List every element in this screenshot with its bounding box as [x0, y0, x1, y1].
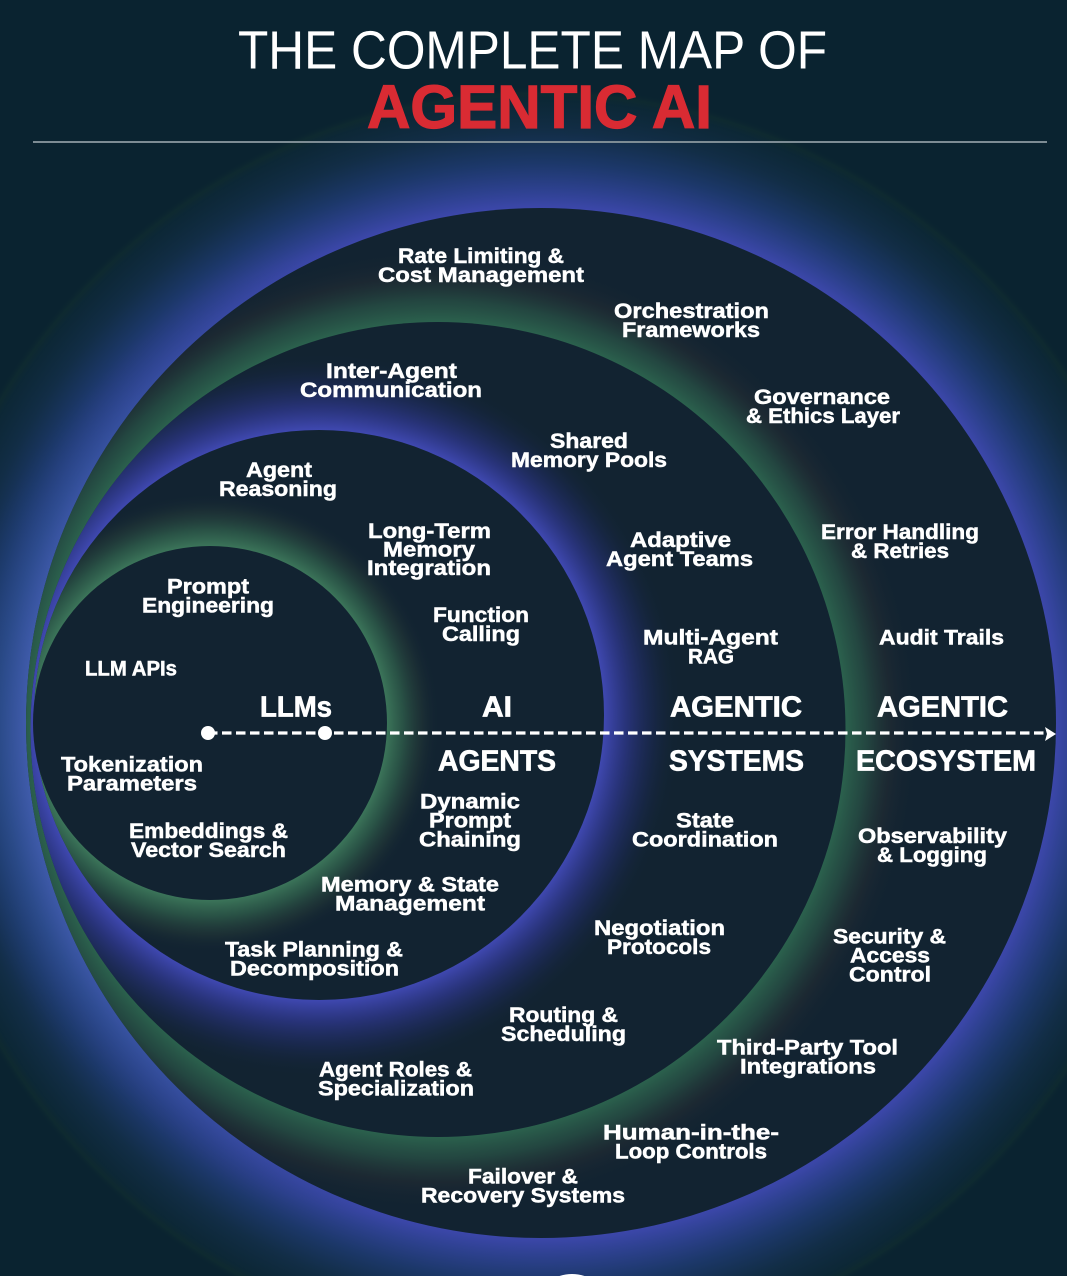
heading: Agentic Systems: SYSTEMS	[669, 746, 804, 778]
label: Rate Limiting & Cost Management: Rate Limiting &	[398, 245, 564, 268]
label: Task Planning & Decomposition: Decomposition	[230, 958, 399, 980]
ring: LLMs	[33, 546, 387, 900]
label: Adaptive Agent Teams: Agent Teams	[606, 548, 753, 571]
label: Tokenization Parameters: Tokenization	[61, 754, 203, 776]
label: Routing & Scheduling	[501, 1004, 626, 1046]
label: LLM APIs: LLM APIs	[85, 658, 177, 680]
label: Third-Party Tool Integrations	[717, 1036, 898, 1078]
label: Task Planning & Decomposition: Task Planning &	[225, 938, 403, 962]
label: Inter-Agent Communication: Inter-Agent	[326, 360, 457, 383]
heading: Agentic Ecosystem: ECOSYSTEM	[856, 746, 1036, 778]
label: Shared Memory Pools: Shared	[550, 430, 628, 453]
label: Failover & Recovery Systems: Failover &	[468, 1166, 578, 1188]
label: Orchestration Frameworks: Orchestration	[614, 300, 769, 323]
label: Error Handling & Retries: & Retries	[851, 540, 949, 563]
cropped white circle at bottom edge	[560, 1274, 584, 1276]
ring: AI agents	[34, 430, 604, 1000]
label: Long-Term Memory Integration: Integration	[367, 557, 491, 580]
label: State Coordination: Coordination	[632, 828, 778, 852]
label: Governance & Ethics Layer	[746, 386, 900, 428]
label: Dynamic Prompt Chaining: Prompt	[429, 810, 511, 832]
label: State Coordination	[632, 810, 778, 852]
label: Security & Access Control: Access	[850, 944, 930, 968]
label: Rate Limiting & Cost Management	[378, 245, 584, 287]
label: Long-Term Memory Integration: Long-Term	[368, 520, 491, 543]
label: Human-in-the-Loop Controls	[603, 1122, 779, 1164]
label: Embeddings & Vector Search	[129, 820, 288, 862]
label: Observability & Logging: Observability	[858, 825, 1007, 848]
label: Multi-Agent RAG	[643, 626, 778, 668]
label: Orchestration Frameworks	[614, 300, 769, 342]
label: Memory & State Management: Management	[335, 892, 485, 916]
label: Negotiation Protocols	[594, 917, 725, 959]
label: Agent Roles & Specialization	[318, 1058, 474, 1100]
label: Memory & State Management: Memory & State	[321, 874, 499, 896]
label: Embeddings & Vector Search: Embeddings &	[129, 820, 288, 843]
heading: Agentic Systems	[669, 692, 804, 778]
label: Dynamic Prompt Chaining: Chaining	[419, 828, 521, 852]
ring: agentic systems	[30, 322, 846, 1137]
heading: Agentic Systems: AGENTIC	[670, 692, 802, 724]
label: Negotiation Protocols: Negotiation	[594, 917, 725, 940]
label: Governance & Ethics Layer: Governance	[754, 386, 890, 409]
heading: Agentic Ecosystem: AGENTIC	[877, 692, 1008, 724]
label: Task Planning & Decomposition	[225, 938, 403, 980]
label: Dynamic Prompt Chaining	[419, 790, 521, 852]
label: Rate Limiting & Cost Management: Cost Management	[378, 264, 584, 287]
heading: AI Agents: AI	[482, 692, 512, 724]
label: Function Calling: Calling	[442, 623, 520, 646]
label: Prompt Engineering: Engineering	[142, 594, 274, 618]
label: Error Handling & Retries	[821, 521, 979, 563]
title	[238, 20, 827, 141]
label: Tokenization Parameters	[61, 754, 203, 796]
label: Long-Term Memory Integration: Memory	[383, 538, 475, 562]
label: Tokenization Parameters: Parameters	[67, 772, 197, 796]
label: Agent Roles & Specialization: Specialization	[318, 1078, 474, 1100]
title divider	[33, 141, 1047, 143]
title: THE COMPLETE MAP OF	[238, 20, 827, 80]
label: State Coordination: State	[676, 810, 734, 832]
heading: AI Agents	[438, 692, 556, 778]
label: Prompt Engineering: Prompt	[167, 576, 249, 598]
label: Multi-Agent RAG: RAG	[688, 646, 734, 668]
label: Dynamic Prompt Chaining: Dynamic	[420, 790, 520, 814]
label: Agent Reasoning: Agent	[246, 459, 312, 482]
label: Function Calling	[433, 604, 529, 646]
label: Adaptive Agent Teams: Adaptive	[630, 529, 731, 552]
label: Third-Party Tool Integrations: Third-Party Tool	[717, 1036, 898, 1060]
label: Audit Trails: Audit Trails	[879, 626, 1004, 650]
label: Inter-Agent Communication: Communication	[300, 379, 482, 402]
label: Third-Party Tool Integrations: Integrations	[740, 1056, 876, 1078]
label: Routing & Scheduling: Scheduling	[501, 1023, 626, 1046]
label: Multi-Agent RAG: Multi-Agent	[643, 626, 778, 650]
label: Shared Memory Pools: Memory Pools	[511, 449, 667, 472]
label: Prompt Engineering	[142, 576, 274, 618]
title: AGENTIC AI	[367, 73, 712, 141]
arrow: progression axis	[201, 726, 1056, 741]
label: Security & Access Control	[833, 926, 946, 986]
heading: AI Agents: AGENTS	[438, 746, 556, 778]
label: Orchestration Frameworks: Frameworks	[622, 319, 760, 342]
label: Agent Roles & Specialization: Agent Roles &	[319, 1058, 472, 1082]
label: Routing & Scheduling: Routing &	[509, 1004, 618, 1027]
label: Observability & Logging: & Logging	[877, 844, 987, 867]
label: Human-in-the-Loop Controls: Loop Controls	[615, 1140, 767, 1164]
label: Long-Term Memory Integration	[367, 520, 491, 580]
label: Error Handling & Retries: Error Handling	[821, 521, 979, 544]
label: Agent Reasoning	[219, 459, 337, 501]
label: Observability & Logging	[858, 825, 1007, 867]
label: Failover & Recovery Systems: Recovery Systems	[421, 1184, 625, 1208]
label: Governance & Ethics Layer: & Ethics Layer	[746, 405, 900, 428]
label: Memory & State Management	[321, 874, 499, 916]
label: Function Calling: Function	[433, 604, 529, 627]
label: Negotiation Protocols: Protocols	[607, 936, 711, 959]
label: Shared Memory Pools	[511, 430, 667, 472]
label: Human-in-the-Loop Controls: Human-in-the-	[603, 1122, 779, 1144]
label: Embeddings & Vector Search: Vector Search	[131, 839, 286, 862]
heading: Agentic Ecosystem	[856, 692, 1036, 778]
label: Failover & Recovery Systems	[421, 1166, 625, 1208]
label: Adaptive Agent Teams	[606, 529, 753, 571]
label: Inter-Agent Communication	[300, 360, 482, 402]
heading: LLMs: LLMs	[260, 692, 332, 724]
label: Security & Access Control: Control	[849, 964, 931, 986]
label: Security & Access Control: Security &	[833, 926, 946, 948]
ring: agentic ecosystem	[26, 208, 1056, 1238]
label: Agent Reasoning: Reasoning	[219, 478, 337, 501]
